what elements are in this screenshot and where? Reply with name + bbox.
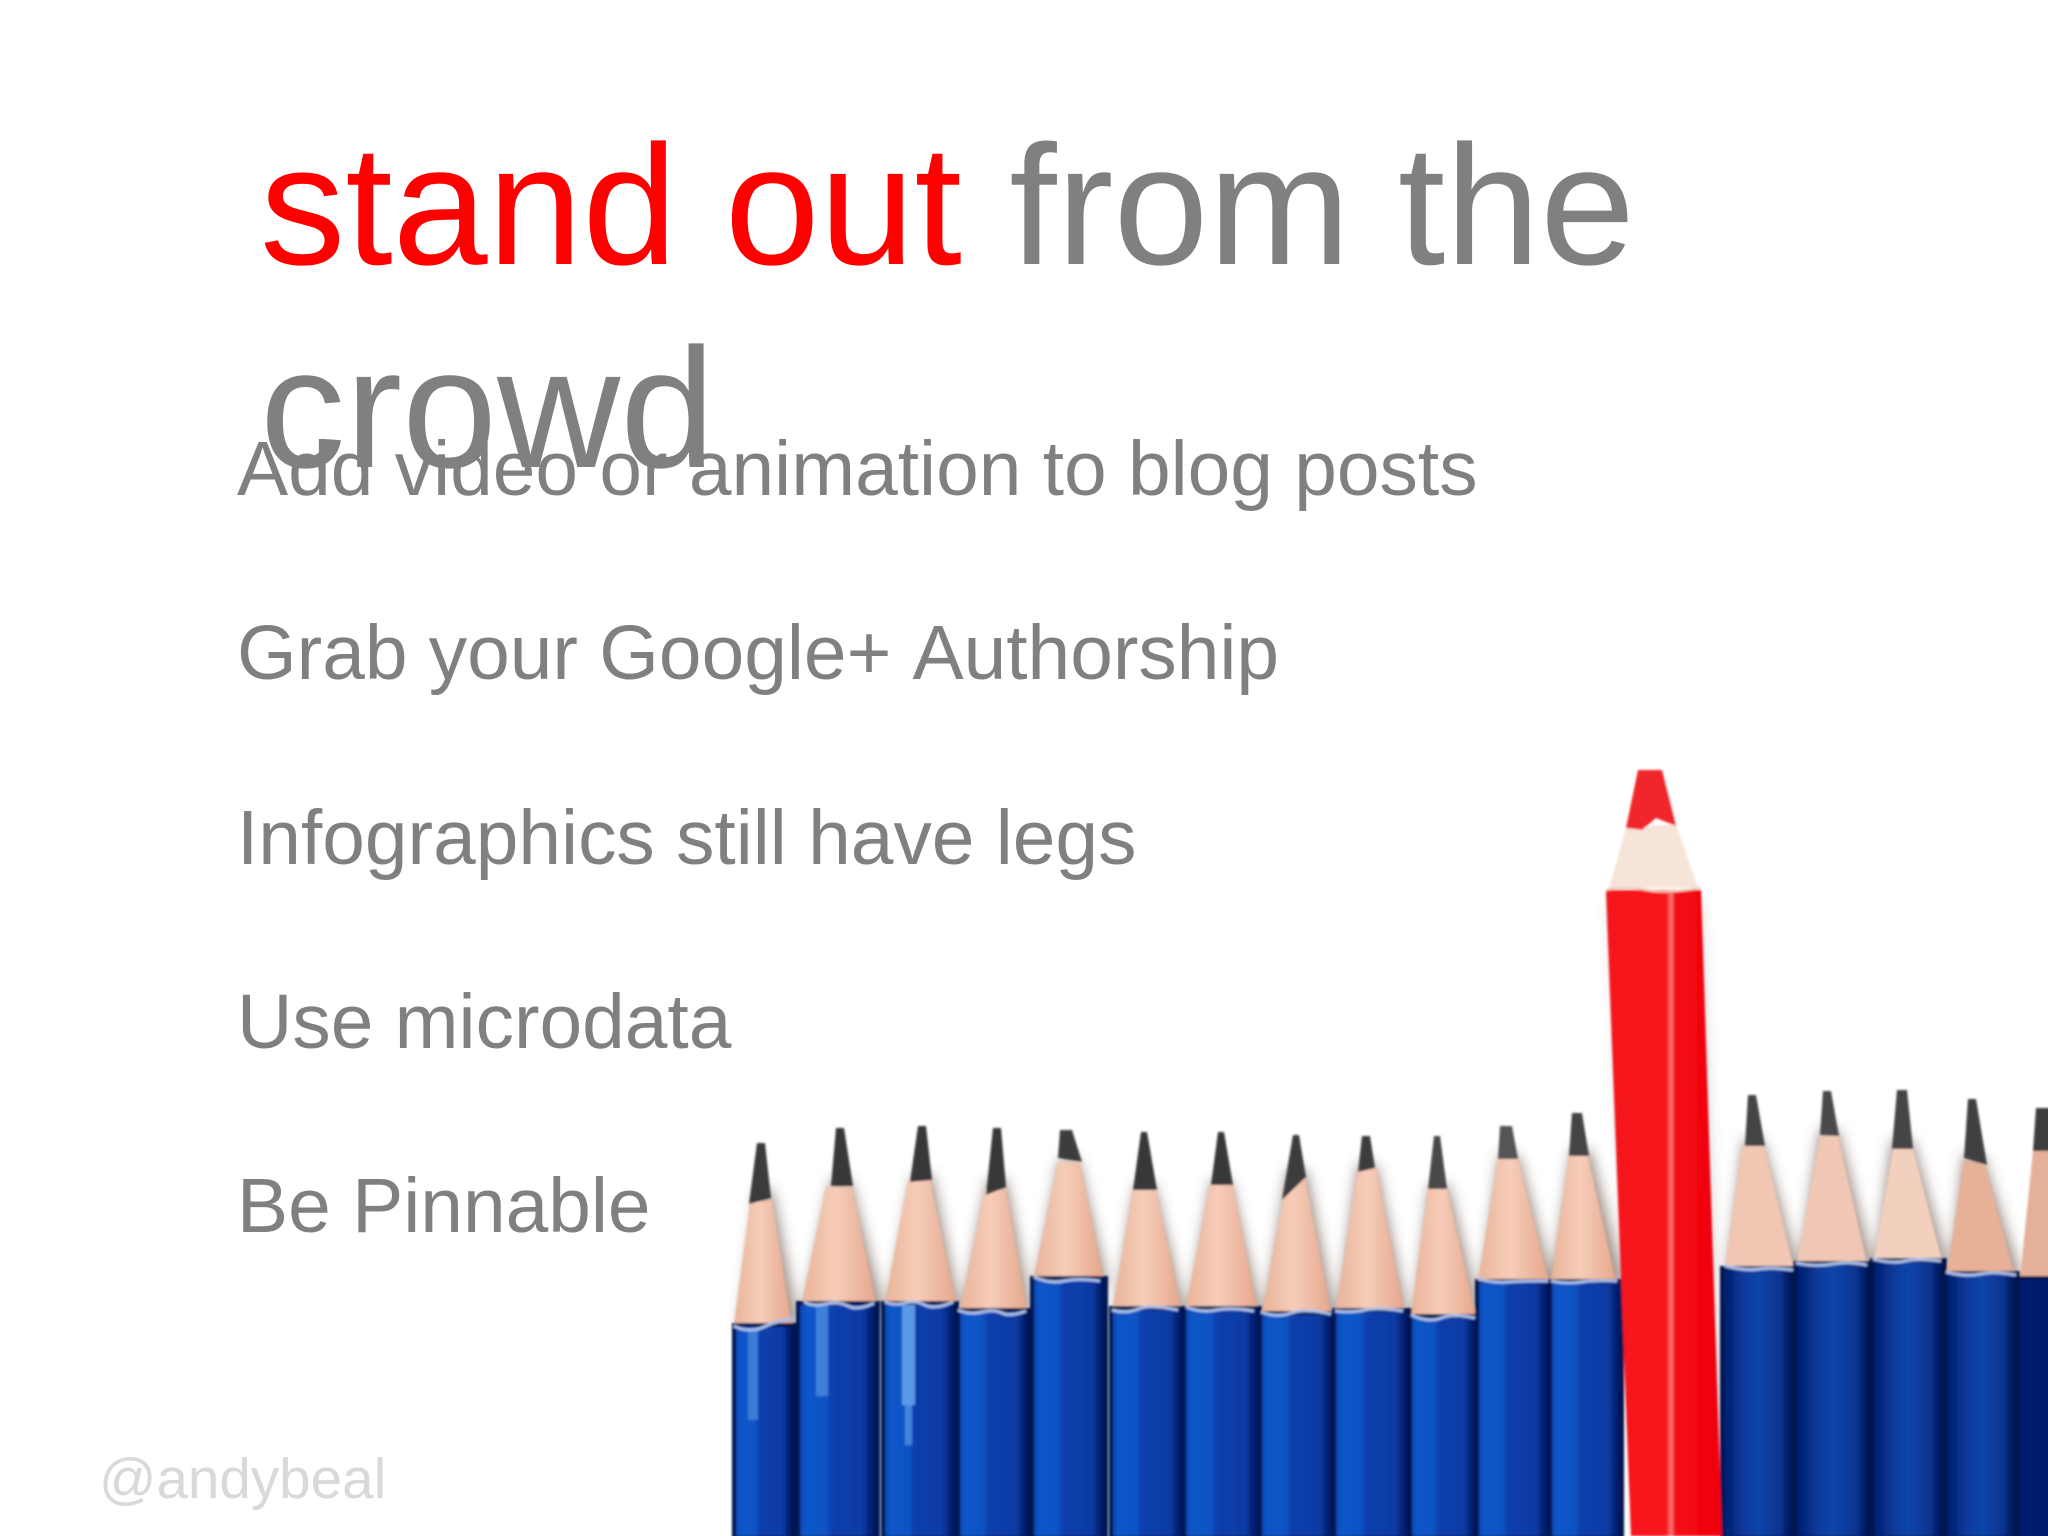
pencil 9 — [1334, 1136, 1410, 1536]
item: infographics: Infographics still have legs — [237, 796, 1136, 881]
pencil 1 — [734, 1143, 794, 1536]
pencil 6 — [1111, 1132, 1184, 1536]
pencil 5 — [1032, 1130, 1106, 1536]
pencil 3 — [883, 1126, 957, 1536]
pencil 14 — [1795, 1091, 1872, 1536]
title line 1: stand out from the — [260, 111, 1635, 301]
item: microdata: Use microdata — [237, 980, 732, 1065]
pencil 7 — [1184, 1132, 1260, 1536]
pencil 15 — [1872, 1090, 1945, 1536]
pencil 16 — [1945, 1099, 2018, 1536]
item: pinnable: Be Pinnable — [237, 1164, 651, 1249]
pencil 11 — [1477, 1126, 1550, 1536]
pencil 12 — [1550, 1113, 1622, 1536]
item: Google+ Authorship: Grab your Google+ Authorship — [237, 611, 1279, 696]
pencil 2 — [798, 1128, 878, 1536]
red pencil — [1606, 770, 1722, 1536]
bullet list — [237, 427, 1478, 1249]
pencil 8 — [1260, 1135, 1334, 1536]
pencil 17 — [2018, 1108, 2048, 1536]
title: stand out from the crowd — [260, 111, 1635, 504]
item: video or animation: Add video or animation to blog posts — [237, 427, 1478, 512]
pencil 10 — [1410, 1136, 1477, 1536]
illustration: row of blue pencils with one tall red pencil — [734, 770, 2048, 1536]
watermark: handle: @andybeal — [99, 1447, 386, 1510]
pencil shadows — [740, 900, 2022, 1536]
pencil 4 — [958, 1128, 1030, 1536]
pencil 13 — [1722, 1095, 1795, 1536]
title line 2: crowd — [260, 314, 715, 504]
